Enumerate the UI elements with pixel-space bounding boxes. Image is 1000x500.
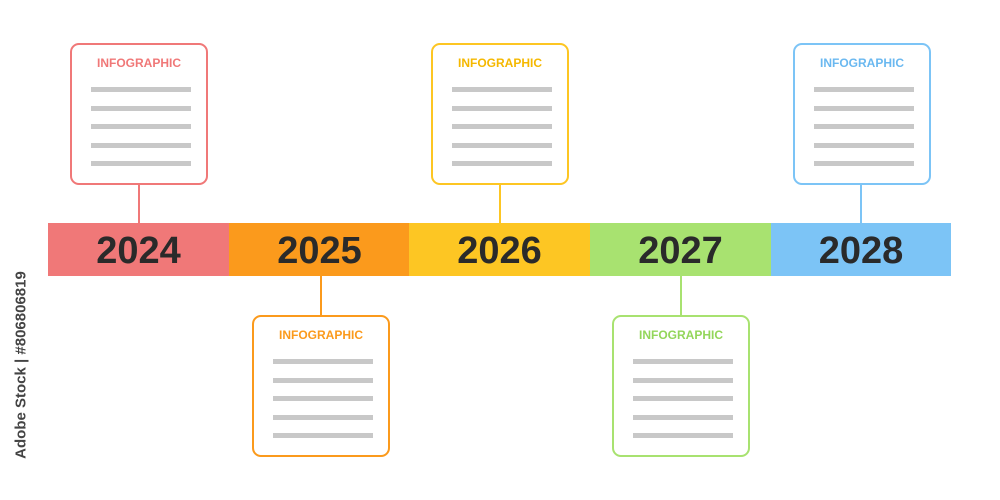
segment 2028: 2028 — [819, 230, 903, 272]
segment 2027: 2027 — [638, 230, 723, 272]
card 2028 — [793, 43, 931, 185]
segment 2024 — [48, 223, 229, 276]
segment 2028 — [771, 223, 951, 276]
connector 2024 — [138, 185, 140, 223]
segment 2025: 2025 — [277, 230, 362, 272]
segment 2027 — [590, 223, 771, 276]
segment 2025 — [229, 223, 410, 276]
card 2026: INFOGRAPHIC — [458, 56, 542, 70]
segment 2026: 2026 — [457, 230, 542, 272]
connector 2028 — [860, 185, 862, 223]
card 2027: INFOGRAPHIC — [639, 328, 723, 342]
segment 2024: 2024 — [96, 230, 181, 272]
card 2024 — [70, 43, 208, 185]
connector 2027 — [680, 276, 682, 315]
card 2024: INFOGRAPHIC — [97, 56, 181, 70]
connector 2025 — [320, 276, 322, 315]
connector 2026 — [499, 185, 501, 223]
timeline bar — [48, 223, 951, 276]
watermark text: Adobe Stock | #806806819 — [12, 271, 30, 459]
card 2026 — [431, 43, 569, 185]
card 2027 — [612, 315, 750, 457]
card 2025 — [252, 315, 390, 457]
card 2028: INFOGRAPHIC — [820, 56, 904, 70]
segment 2026 — [409, 223, 590, 276]
card 2025: INFOGRAPHIC — [279, 328, 363, 342]
